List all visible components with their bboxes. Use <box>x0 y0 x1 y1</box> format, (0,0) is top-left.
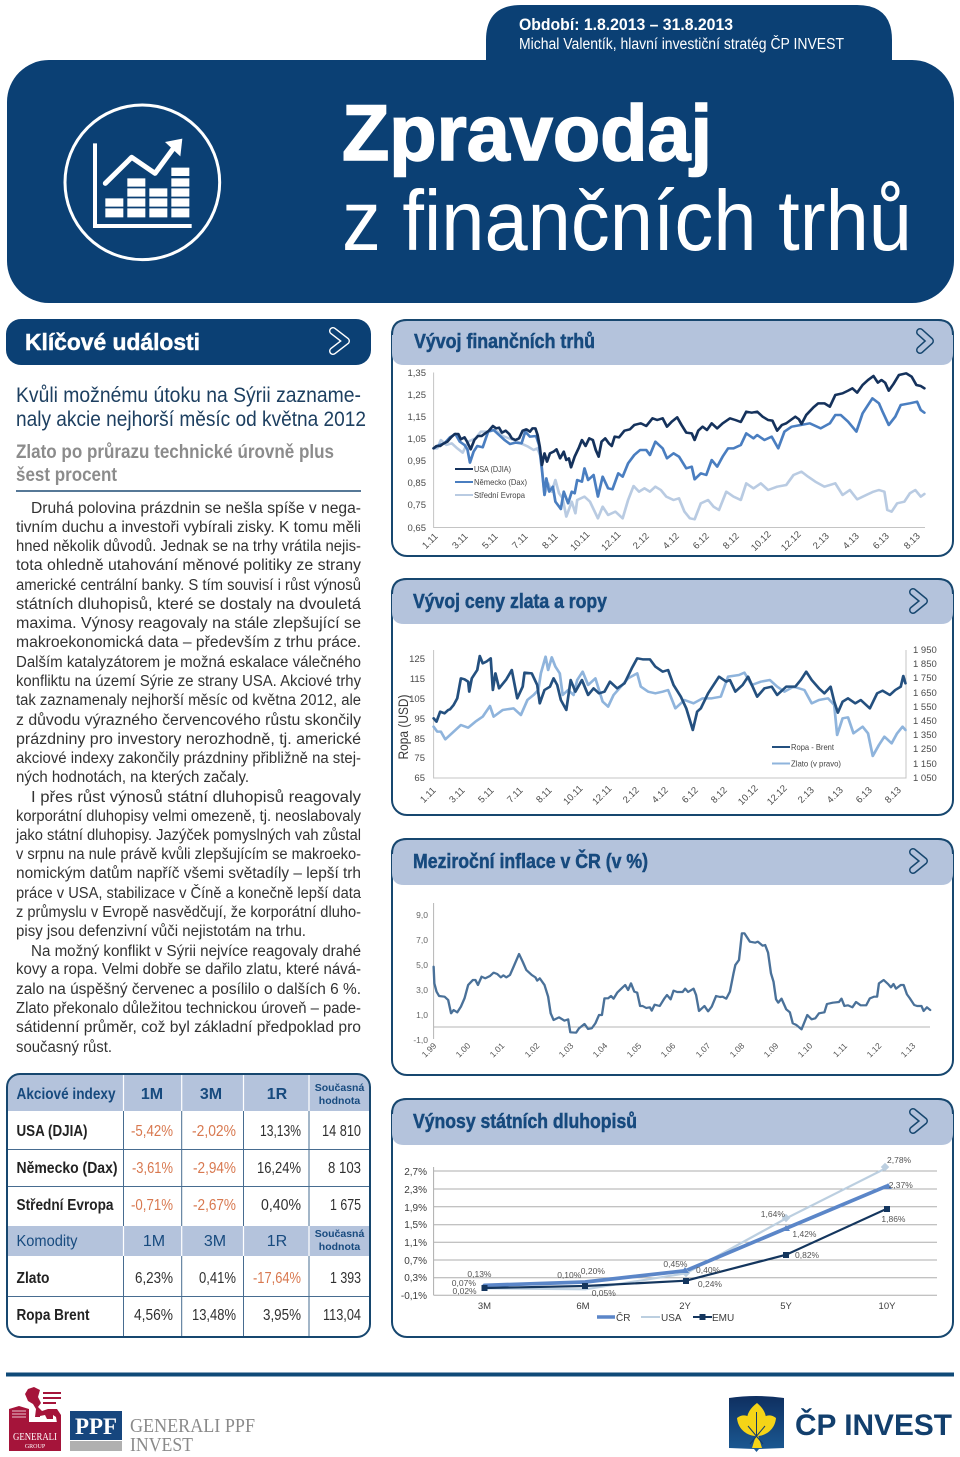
legend: USA <box>661 1313 682 1324</box>
article text: tivním duchu a investoři vybírali zisky. K tomu měli <box>16 519 361 536</box>
line chart: stock indices: 4.12 <box>661 531 682 552</box>
axis title: Ropa (USD) <box>395 694 411 760</box>
line chart: yield curves: 2Y <box>679 1301 691 1312</box>
line chart: yield curves: 2,78% <box>887 1155 912 1165</box>
article text: zalo na úspěšný červenec a posílilo o dalších 6 %. <box>16 981 361 998</box>
line chart: stock indices: 0,85 <box>408 478 426 489</box>
line chart: oil and gold: 75 <box>414 753 425 764</box>
line chart: oil and gold: 1 450 <box>913 716 937 727</box>
title: z finančních trhů <box>342 174 912 269</box>
table header: equity indices <box>16 1082 364 1107</box>
line chart: yield curves: 0,07% <box>452 1278 476 1288</box>
line chart: inflation: 7,0 <box>416 935 428 945</box>
legend: USA (DJIA) <box>474 464 511 474</box>
article text: ných hodnotách, na kterých začaly. <box>16 769 249 786</box>
title: Zpravodaj <box>342 88 712 177</box>
line chart: oil and gold: 3.11 <box>447 785 468 806</box>
line chart: oil and gold <box>395 645 937 808</box>
line chart: oil and gold: 8.12 <box>709 785 730 806</box>
table header: equity indices: Akciové indexy <box>16 1086 116 1103</box>
line chart: yield curves: 2,37% <box>889 1180 913 1190</box>
line chart: oil and gold: 2.13 <box>796 785 817 806</box>
legend: ČR <box>616 1311 630 1324</box>
line chart: stock indices: 0,75 <box>408 500 426 511</box>
line chart: oil and gold: 10.11 <box>561 783 585 807</box>
line chart: oil and gold: 7.11 <box>505 785 526 806</box>
icon: chart in circle <box>65 105 220 260</box>
line chart: inflation: -1,0 <box>413 1035 428 1045</box>
article text: nomickým datům napříč všemi světadíly – lepší trh <box>16 865 361 882</box>
line chart: inflation: 1.03 <box>557 1040 576 1059</box>
logo text: INVEST <box>130 1434 193 1456</box>
article text: konfliktu na území Sýrie ze strany USA. Akciové trhy <box>16 673 361 690</box>
line chart: yield curves: 0,02% <box>452 1286 477 1296</box>
table rows: equity indices: 1 675 <box>330 1197 361 1214</box>
table rows: equity indices: 0,40% <box>261 1197 301 1214</box>
line chart: yield curves: -0,1% <box>401 1291 427 1302</box>
article text: akciové indexy zakončily prázdniny přibližně na stej- <box>16 750 361 767</box>
heading: inflation: Meziroční inflace v ČR (v %) <box>413 849 648 873</box>
headline <box>16 384 366 431</box>
line chart: yield curves: 6M <box>576 1301 590 1312</box>
heading: government bond yields: Výnosy státních dluhopisů <box>413 1111 637 1133</box>
panel: financial markets <box>392 320 953 556</box>
panel: inflation <box>392 839 953 1075</box>
article text: z důvodu výrazného červencového růstu skončily <box>16 712 361 729</box>
line chart: stock indices: 5.11 <box>480 531 501 552</box>
table rows: commodities: 113,04 <box>323 1307 361 1324</box>
article text: pisy jsou defenzivní vůči nejistotám na trhu. <box>16 923 306 940</box>
line chart: oil and gold: 65 <box>414 773 425 784</box>
line chart: stock indices: 8.11 <box>540 531 561 552</box>
line chart: stock indices <box>408 368 925 554</box>
article text: Na možný konflikt v Sýrii nejvíce reagovaly drahé <box>31 943 361 960</box>
table rows: equity indices: USA (DJIA) <box>16 1123 88 1140</box>
line chart: oil and gold: 12.12 <box>765 783 790 808</box>
article text: prázdniny pro investory nerozhodně, tj. americké <box>16 731 361 748</box>
period tab: Období: 1.8.2013 – 31.8.2013 <box>519 15 733 34</box>
line chart: yield curves: 1,86% <box>881 1214 906 1224</box>
table header: equity indices: Současná <box>315 1082 364 1094</box>
table rows: commodities: 4,56% <box>134 1307 173 1324</box>
line chart: yield curves: 1,9% <box>404 1203 427 1214</box>
heading: financial markets: Vývoj finančních trhů <box>414 331 595 353</box>
line chart: oil and gold: 2.12 <box>621 785 642 806</box>
article text: státních dluhopisů, které se dostaly na dvouletá <box>16 596 361 613</box>
article text: sátidenní průměr, což byl základní předpoklad pro <box>16 1019 361 1036</box>
icon: linden leaf shield <box>729 1396 784 1452</box>
line chart: inflation: 3,0 <box>416 985 428 995</box>
article text: současný růst. <box>16 1039 112 1056</box>
line chart: yield curves: 0,24% <box>698 1279 722 1289</box>
article text: Zlato překonalo důležitou technickou úroveň – pade- <box>16 1000 361 1017</box>
legend: EMU <box>712 1313 734 1324</box>
table header: commodities: 3M <box>204 1233 226 1250</box>
line chart: yield curves: 0,20% <box>581 1266 605 1276</box>
table rows: commodities: 0,41% <box>199 1270 236 1287</box>
line chart: oil and gold: 115 <box>410 674 425 685</box>
line chart: inflation: 5,0 <box>416 960 428 970</box>
line chart: inflation: 1.10 <box>796 1040 815 1059</box>
heading: key events: Klíčové události <box>25 329 200 355</box>
article text: hned několik důvodů. Jednak se na trhy vrátila nejis- <box>16 538 361 555</box>
line chart: yield curves: 1,5% <box>404 1220 427 1231</box>
line chart: yield curves: 2,7% <box>404 1167 427 1178</box>
line chart: inflation <box>413 903 930 1059</box>
table header: equity indices: 3M <box>200 1086 222 1103</box>
line chart: stock indices: 2.13 <box>811 531 832 552</box>
line chart: yield curves: 0,05% <box>592 1288 616 1298</box>
line chart: oil and gold: 1.11 <box>418 785 439 806</box>
table header: equity indices: 1M <box>141 1086 163 1103</box>
line chart: yield curves: 0,7% <box>404 1256 427 1267</box>
article text: americké centrální banky. S tím souvisí i růst výnosů <box>16 577 361 594</box>
line chart: yield curves: 1,1% <box>404 1238 427 1249</box>
table rows: equity indices: -0,71% <box>131 1197 173 1214</box>
line chart: inflation: 1.05 <box>625 1040 644 1059</box>
banner background <box>7 60 954 303</box>
table rows: equity indices <box>16 1123 361 1214</box>
subheadline <box>16 442 334 486</box>
table header: equity indices: hodnota <box>319 1095 360 1107</box>
line chart: stock indices: 10.11 <box>568 529 592 553</box>
heading: key events <box>6 319 371 365</box>
line chart: inflation: 1.08 <box>728 1040 747 1059</box>
logo wordmark: ČP INVEST <box>795 1408 952 1442</box>
table rows: commodities <box>16 1270 361 1324</box>
logo: PPF block: PPF <box>75 1414 117 1439</box>
article text: tak zaznamenaly nejhorší měsíc od května 2012, ale <box>16 692 361 709</box>
line chart: oil and gold: 6.12 <box>680 785 701 806</box>
logo: Generali lion <box>9 1387 61 1451</box>
table rows: equity indices: -2,94% <box>193 1160 236 1177</box>
line chart: stock indices: 2.12 <box>631 531 652 552</box>
line chart: stock indices: 1.11 <box>420 531 441 552</box>
article text: jako státní dluhopisy. Jazýček pomyslných vah zůstal <box>15 827 361 844</box>
table rows: commodities: 1 393 <box>330 1270 361 1287</box>
line chart: oil and gold: 10.12 <box>736 783 761 808</box>
line chart: stock indices: 3.11 <box>450 531 471 552</box>
article text: I přes růst výnosů státní dluhopisů reagovaly <box>31 789 361 806</box>
heading: government bond yields <box>392 1099 953 1145</box>
line chart: inflation: 1.02 <box>523 1040 542 1059</box>
article text: maxima. Výnosy reagovaly na stále zlepšující se <box>16 615 361 632</box>
line chart: inflation: 1.01 <box>488 1040 507 1059</box>
line chart: stock indices: 12.11 <box>599 529 623 553</box>
line chart: yield curves: 0,3% <box>404 1273 427 1284</box>
line chart: stock indices: 1,35 <box>408 368 426 379</box>
line chart: inflation: 1.07 <box>694 1040 713 1059</box>
line chart: oil and gold: 1 050 <box>913 773 937 784</box>
line chart: yield curves: 0,40% <box>696 1265 721 1275</box>
table rows: equity indices: -2,02% <box>192 1123 236 1140</box>
legend <box>772 742 841 768</box>
period tab <box>486 5 892 62</box>
line chart: oil and gold: 5.11 <box>476 785 497 806</box>
line chart: yield curves: 0,13% <box>467 1269 492 1279</box>
legend: Zlato (v pravo) <box>791 758 841 768</box>
title <box>342 88 912 269</box>
line chart: inflation: 1.04 <box>591 1040 610 1059</box>
table header: commodities: Komodity <box>16 1233 78 1250</box>
panel: government bond yields <box>392 1099 953 1337</box>
line chart: yield curves: 2,3% <box>404 1185 427 1196</box>
logo text <box>130 1415 255 1456</box>
table rows: equity indices: Německo (Dax) <box>16 1160 118 1177</box>
line chart: oil and gold: 6.13 <box>854 785 875 806</box>
logo text: GENERALI PPF <box>130 1415 255 1437</box>
line chart: oil and gold: 1 650 <box>913 688 937 699</box>
article text: Druhá polovina prázdnin se nešla spíše v nega- <box>31 500 361 517</box>
line chart: stock indices: 6.12 <box>691 531 712 552</box>
article text: makroekonomická data – především z trhu práce. <box>16 634 361 651</box>
table rows: equity indices: 14 810 <box>322 1123 361 1140</box>
masthead banner <box>7 5 954 303</box>
table rows: commodities: -17,64% <box>253 1270 301 1287</box>
line chart: inflation: 1.11 <box>831 1041 849 1059</box>
legend: Střední Evropa <box>474 490 525 500</box>
line chart: yield curves: 3M <box>478 1301 491 1312</box>
legend <box>455 464 527 500</box>
line chart: stock indices: 0,95 <box>408 456 426 467</box>
table rows: equity indices: -5,42% <box>131 1123 173 1140</box>
logo: ČP Invest <box>729 1396 952 1452</box>
table rows: commodities: Zlato <box>16 1270 50 1287</box>
table rows: equity indices: 8 103 <box>328 1160 361 1177</box>
line chart: oil and gold: 4.13 <box>825 785 846 806</box>
article text: korporátní dluhopisy velmi omezeně, tj. neoslabovaly <box>16 808 361 825</box>
line chart: inflation: 1.09 <box>762 1040 781 1059</box>
subheadline: šest procent <box>16 465 118 486</box>
headline: naly akcie nejhorší měsíc od května 2012 <box>16 408 366 431</box>
headline: Kvůli možnému útoku na Sýrii zazname- <box>16 384 361 407</box>
table rows: equity indices: 16,24% <box>257 1160 301 1177</box>
legend: Německo (Dax) <box>474 477 527 487</box>
article text: tota ohledně utahování měnové politiky ze strany <box>16 557 361 574</box>
line chart: stock indices: 1,25 <box>408 390 426 401</box>
subheadline: Zlato po průrazu technické úrovně plus <box>16 442 334 463</box>
line chart: oil and gold: 85 <box>414 734 425 745</box>
line chart: stock indices: 7.11 <box>510 531 531 552</box>
logo: Generali PPF Invest <box>9 1387 255 1456</box>
line chart: oil and gold: 8.11 <box>534 785 555 806</box>
article text <box>15 500 361 1056</box>
line chart: oil and gold: 1 750 <box>913 673 937 684</box>
panel: key events <box>6 319 371 1056</box>
line chart: stock indices: 8.12 <box>721 531 742 552</box>
line chart: inflation: 1.12 <box>865 1040 884 1059</box>
logo: Generali lion: GROUP <box>25 1444 46 1450</box>
line chart: oil and gold: 125 <box>409 654 425 665</box>
line chart: stock indices: 1,05 <box>408 434 426 445</box>
table header: commodities: hodnota <box>319 1241 360 1253</box>
line chart: stock indices: 0,65 <box>408 523 426 534</box>
line chart: inflation: 1.13 <box>899 1040 918 1059</box>
logo: Generali lion: GENERALI <box>13 1431 57 1443</box>
table rows: equity indices: -2,67% <box>193 1197 236 1214</box>
table header: equity indices: 1R <box>267 1086 288 1103</box>
period tab: Michal Valentík, hlavní investiční stratég ČP INVEST <box>519 36 844 53</box>
line chart: inflation: 1,0 <box>416 1010 428 1020</box>
article text: kovy a ropa. Velmi dobře se dařilo zlatu, které nává- <box>16 961 361 978</box>
heading: gold and oil <box>392 579 953 624</box>
line chart: oil and gold: 95 <box>414 714 425 725</box>
table header: commodities: 1R <box>267 1233 287 1250</box>
line chart: inflation: 1.00 <box>454 1040 473 1059</box>
table rows: commodities: 6,23% <box>135 1270 173 1287</box>
table header: commodities: 1M <box>143 1233 165 1250</box>
heading: inflation <box>392 839 953 885</box>
line chart: oil and gold: 1 150 <box>913 759 937 770</box>
line chart: oil and gold: 105 <box>409 694 425 705</box>
table header: commodities: Současná <box>315 1228 364 1240</box>
line chart: oil and gold: 1 850 <box>913 659 937 670</box>
line chart: yield curves: 5Y <box>780 1301 792 1312</box>
table rows: commodities: 13,48% <box>192 1307 236 1324</box>
line chart: inflation: 1.06 <box>659 1040 678 1059</box>
line chart: stock indices: 12.12 <box>779 529 804 554</box>
line chart: yield curves: 0,10% <box>557 1270 582 1280</box>
table header: commodities <box>16 1228 364 1253</box>
line chart: inflation: 1.99 <box>420 1040 439 1059</box>
line chart: oil and gold: 4.12 <box>650 785 671 806</box>
line chart: oil and gold: 1 550 <box>913 702 937 713</box>
table rows: commodities: Ropa Brent <box>16 1307 90 1324</box>
table: indices and commodities <box>7 1074 370 1337</box>
line chart: stock indices: 4.13 <box>841 531 862 552</box>
line chart: oil and gold: 1 350 <box>913 730 937 741</box>
line chart: stock indices: 6.13 <box>871 531 892 552</box>
line chart: yield curves: 0,45% <box>663 1259 688 1269</box>
article text: v srpnu na nule právě kvůli zlepšujícím se makroeko- <box>16 846 361 863</box>
heading: financial markets <box>392 320 953 365</box>
line chart: oil and gold: 8.13 <box>883 785 904 806</box>
logo: PPF block <box>70 1411 122 1451</box>
line chart: yield curves: 1,64% <box>761 1209 785 1219</box>
table rows: commodities: 3,95% <box>263 1307 301 1324</box>
article text: z průmyslu v Evropě nasvědčují, že korporátní dluho- <box>16 904 361 921</box>
line chart: oil and gold: 1 950 <box>913 645 937 656</box>
line chart: stock indices: 1,15 <box>408 412 426 423</box>
article text: Dalším katalyzátorem je možná eskalace válečného <box>16 654 361 671</box>
line chart: yield curves: 1,42% <box>792 1229 817 1239</box>
legend <box>597 1311 734 1324</box>
line chart: oil and gold: 12.11 <box>590 783 614 807</box>
line chart: stock indices: 8.13 <box>902 531 923 552</box>
line chart: yield curves: 0,82% <box>795 1250 820 1260</box>
article text: práce v USA, stabilizace v Číně a konečně lepší data <box>16 885 361 902</box>
table rows: equity indices: 13,13% <box>260 1123 301 1140</box>
line chart: inflation: 9,0 <box>416 910 428 920</box>
line chart: stock indices: 10.12 <box>749 529 774 554</box>
panel: gold and oil <box>392 579 953 815</box>
line chart: oil and gold: 1 250 <box>913 744 937 755</box>
heading: gold and oil: Vývoj ceny zlata a ropy <box>413 591 608 613</box>
table rows: equity indices: -3,61% <box>132 1160 173 1177</box>
legend: Ropa - Brent <box>791 742 835 752</box>
table rows: equity indices: Střední Evropa <box>16 1197 114 1214</box>
line chart: yield curves: 10Y <box>879 1301 896 1312</box>
line chart: yield curves <box>401 1155 937 1324</box>
